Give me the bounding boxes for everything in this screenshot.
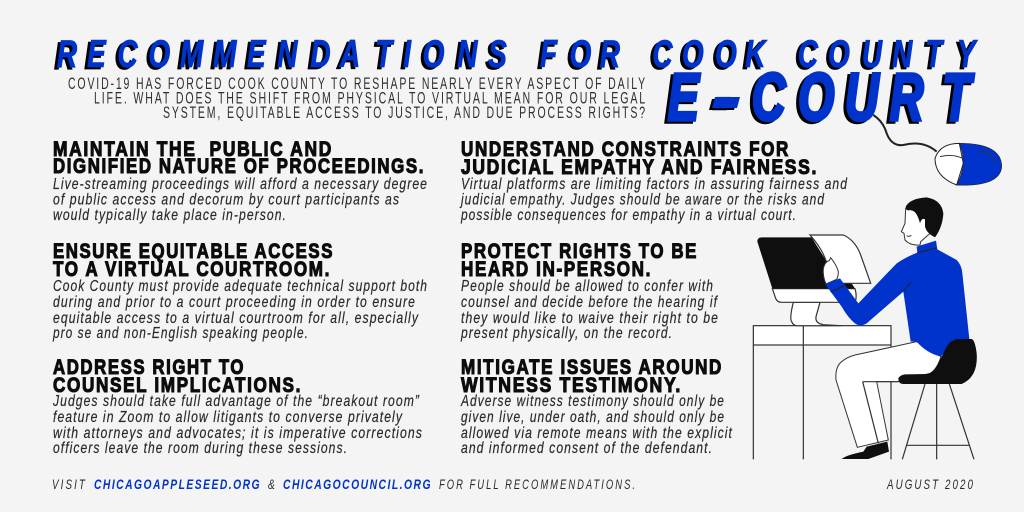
hair [906,197,943,237]
person [823,197,969,459]
intro text: LIFE. WHAT DOES THE SHIFT FROM PHYSICAL TO VIRTUAL MEAN FOR OUR LEGAL [94,88,647,108]
heading: understand [461,138,818,179]
heading: protect: HEARD IN-PERSON. [461,258,652,281]
heading: ensure [53,240,334,281]
panel: maintain public and dignified proceedings [53,138,428,224]
panel: ensure equitable access [52,240,428,342]
body: ensure: equitable access to a virtual courtroom for all, especially [53,310,419,327]
body: mitigate [460,393,733,457]
body: ensure [52,278,428,342]
footer: visit links: CHICAGOAPPLESEED.ORG [94,476,261,492]
heading: understand: JUDICIAL EMPATHY AND FAIRNESS. [461,156,818,179]
body: protect: present physically, on the record. [460,325,673,342]
intro text: COVID-19 HAS FORCED COOK COUNTY TO RESHAPE NEARLY EVERY ASPECT OF DAILY [68,74,647,93]
footer: visit links: FOR FULL RECOMMENDATIONS. [439,476,637,492]
footer: visit links: & [268,476,277,492]
panel: understand constraints [460,138,848,224]
body: maintain: would typically take place in-person. [53,207,287,224]
heading: understand: UNDERSTAND CONSTRAINTS FOR [461,138,790,161]
smile [907,235,911,236]
heading: maintain: MAINTAIN THE PUBLIC AND [53,138,333,161]
footer: visit links: VISIT [52,476,87,492]
body: mitigate: allowed via remote means with the explicit [461,425,733,442]
icon: computer mouse with cable [873,115,1002,185]
desk [753,326,891,459]
body: maintain: of public access and decorum by court participants as [53,192,400,208]
face [901,208,930,245]
heading: address: ADDRESS RIGHT TO [53,356,245,379]
body: mitigate: and informed consent of the defendant. [461,440,713,457]
footer: date: AUGUST 2020 [886,476,975,492]
footer: visit links: CHICAGOCOUNCIL.ORG [283,476,432,492]
body: mitigate: given live, under oath, and should only be [461,409,725,426]
body: address [52,393,423,457]
body: maintain: Live-streaming proceedings will afford a necessary degree [53,176,428,193]
heading: ensure: TO A VIRTUAL COURTROOM. [53,258,331,281]
heading: ensure: ENSURE EQUITABLE ACCESS [53,240,334,263]
panel: protect rights [460,240,719,342]
heading: address: COUNSEL IMPLICATIONS. [53,374,302,397]
body: address: feature in Zoom to allow litigants to converse privately [53,409,403,426]
trousers [836,342,941,447]
stool [898,339,977,459]
shoes [842,442,889,459]
panel: mitigate witness issues [460,356,733,457]
heading: address [53,356,302,397]
body: address: Judges should take full advantage of the “breakout room” [52,393,420,410]
monitor [757,237,856,326]
body: understand: Virtual platforms are limiting factors in assuring fairness and [461,176,848,193]
heading: mitigate [461,356,723,397]
body: address: with attorneys and advocates; it is imperative corrections [53,425,423,442]
body: protect: People should be allowed to confer with [461,278,714,295]
heading: maintain: DIGNIFIED NATURE OF PROCEEDINGS. [53,155,425,178]
body: protect [460,278,719,342]
body: ensure: during and prior to a court proceeding in order to ensure [53,294,416,311]
body: address: officers leave the room during these sessions. [53,440,348,457]
panel: address right to counsel [52,356,423,457]
illustration: person working at computer desk [753,197,977,459]
heading: maintain [53,138,425,178]
intro text: SYSTEM, EQUITABLE ACCESS TO JUSTICE, AND DUE PROCESS RIGHTS? [163,103,647,122]
footer: visit links [52,476,637,492]
body: mitigate: Adverse witness testimony should only be [460,393,725,410]
heading: protect: PROTECT RIGHTS TO BE [461,240,698,263]
body: understand: possible consequences for empathy in a virtual court. [460,207,797,224]
heading: mitigate: MITIGATE ISSUES AROUND [461,356,723,379]
paper [810,235,871,283]
title: E-Court: E-COURT [668,61,975,135]
body: protect: counsel and decide before the hearing if [461,294,718,311]
body: ensure: pro se and non-English speaking people. [52,325,309,342]
hand [823,258,838,284]
body: maintain [53,176,428,224]
title: recommendations for Cook County: RECOMMENDATIONS FOR COOK COUNTY [57,33,978,76]
intro text [68,74,647,122]
body: understand [460,176,848,224]
torso and arm [825,241,969,357]
body: protect: they would like to waive their right to be [461,310,719,327]
heading: mitigate: WITNESS TESTIMONY. [461,374,682,397]
heading: protect [461,240,698,281]
body: ensure: Cook County must provide adequate technical support both [53,278,428,295]
body: understand: judicial empathy. Judges should be aware or the risks and [460,192,825,208]
